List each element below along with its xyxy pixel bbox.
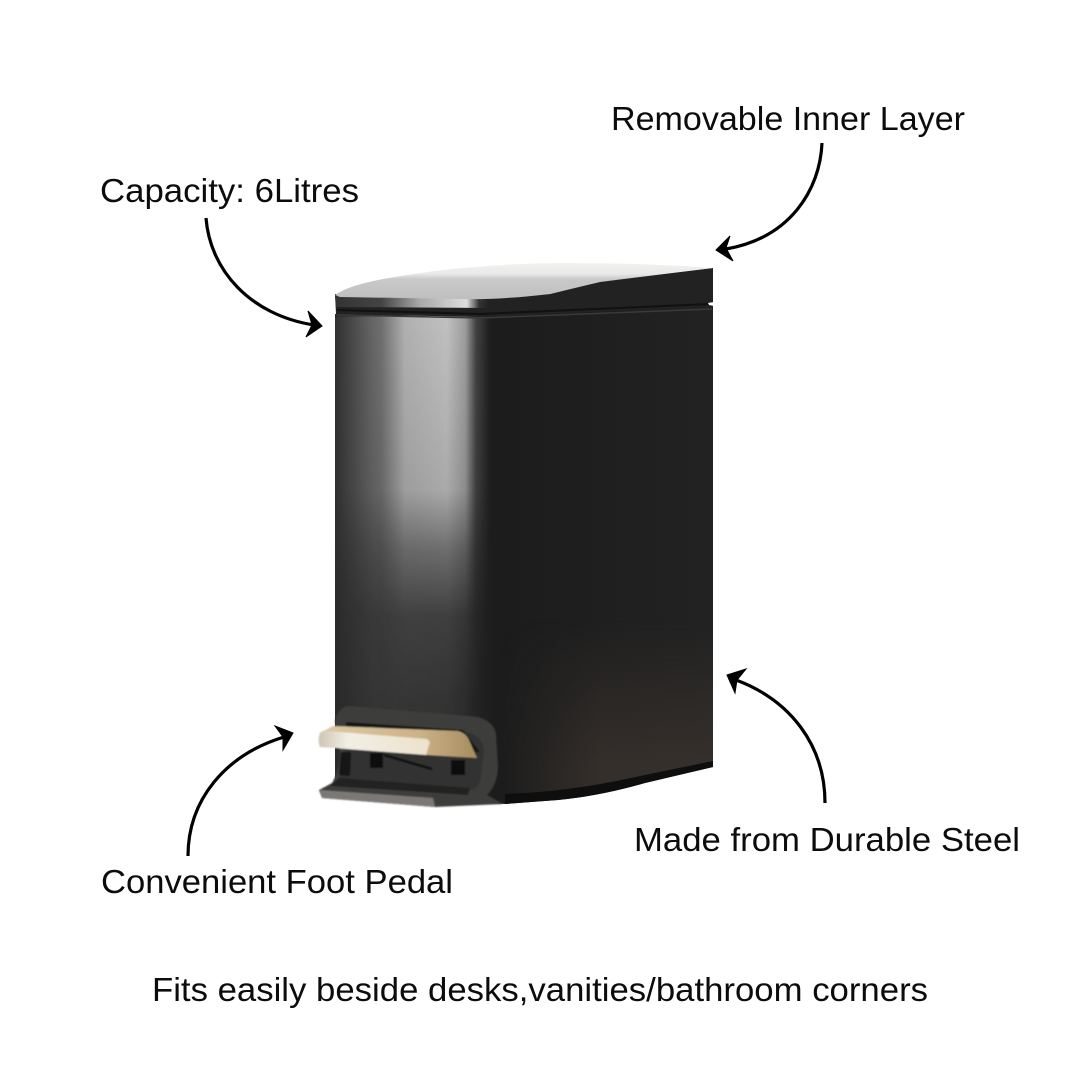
caption: Fits easily beside desks,vanities/bathroom corners <box>152 971 928 1008</box>
pedal interior <box>335 722 484 790</box>
callout: foot pedal <box>101 726 453 900</box>
callout: foot pedal: Convenient Foot Pedal <box>101 863 453 900</box>
foot pedal assembly <box>318 706 503 807</box>
infographic canvas <box>102 106 1018 1008</box>
base lip <box>320 790 435 807</box>
arrow: to pedal <box>188 726 293 856</box>
lid rim <box>335 268 713 317</box>
callout: capacity <box>100 172 359 337</box>
callout: removable inner layer: Removable Inner Layer <box>611 100 965 137</box>
pedal slots <box>370 753 383 768</box>
arrow: to lid <box>716 143 822 261</box>
lid top surface <box>335 263 713 299</box>
callout: durable steel <box>634 669 1020 858</box>
arrow: to body <box>727 669 825 803</box>
callout: capacity: Capacity: 6Litres <box>100 172 359 209</box>
gold pedal plate <box>320 726 477 758</box>
bin body <box>335 306 713 804</box>
callout: removable inner layer <box>611 100 965 261</box>
arrow: to bin top <box>206 218 322 337</box>
callout: durable steel: Made from Durable Steel <box>634 821 1020 858</box>
product: slim black pedal bin <box>318 263 714 807</box>
bin lid <box>335 263 714 318</box>
pedal housing <box>319 706 503 807</box>
